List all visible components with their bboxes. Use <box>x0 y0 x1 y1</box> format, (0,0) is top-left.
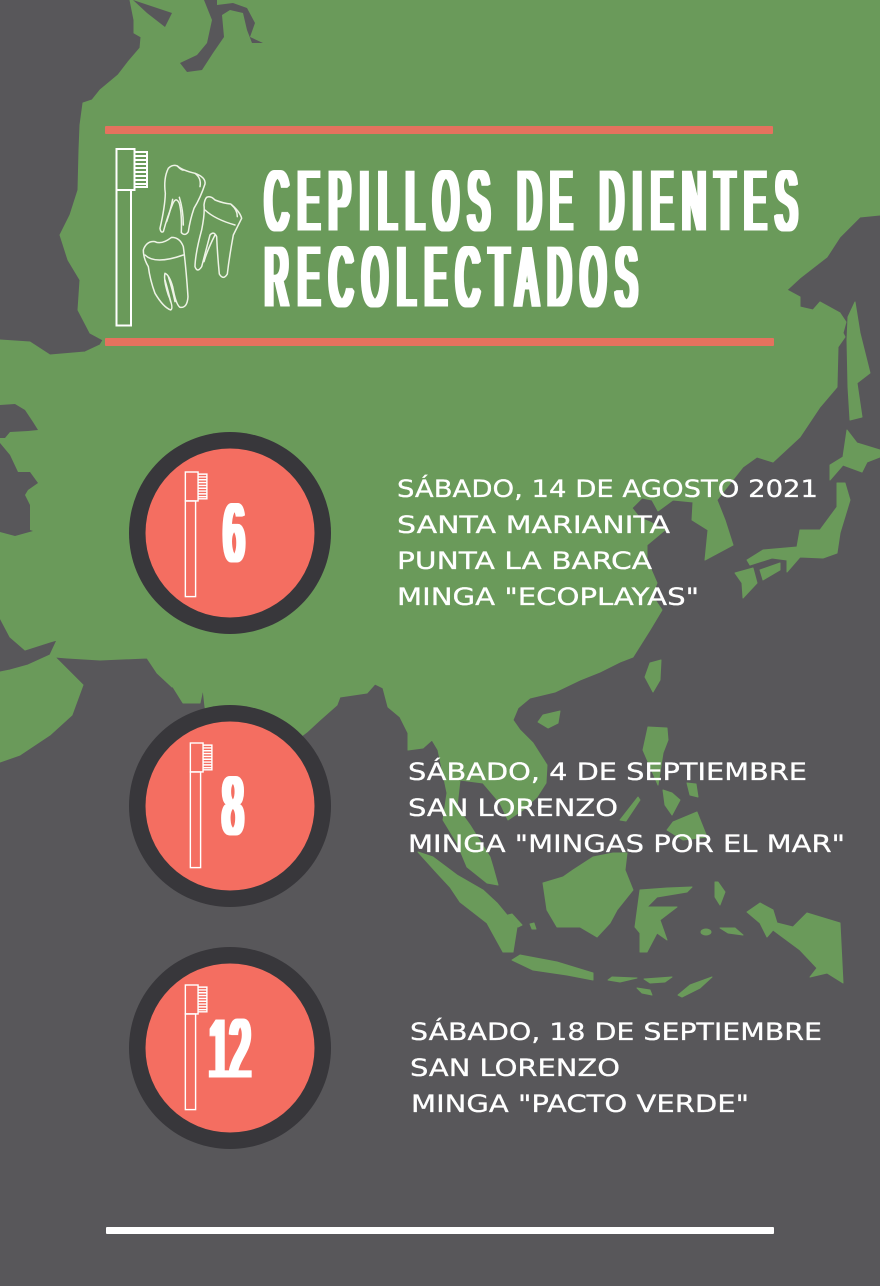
text block: event 1: SANTA MARIANITA <box>397 511 671 539</box>
text block: event 1: PUNTA LA BARCA <box>397 547 653 575</box>
text block: event 1 <box>397 474 818 611</box>
text block: event 3: SÁBADO, 18 DE SEPTIEMBRE <box>410 1017 822 1046</box>
badge: 6 brushes <box>129 432 331 634</box>
badge: 12 brushes <box>129 947 331 1149</box>
text block: event 3: SAN LORENZO <box>410 1054 620 1082</box>
text block: event 1: MINGA "ECOPLAYAS" <box>397 583 699 611</box>
map of Asia <box>0 0 880 997</box>
text block: event 3 <box>410 1017 822 1118</box>
bottom orange rule <box>105 338 774 346</box>
bottom white rule <box>106 1227 774 1234</box>
icon: large toothbrush <box>116 149 147 326</box>
badge: 12 brushes: 12 <box>209 1002 251 1095</box>
text block: event 2: MINGA "MINGAS POR EL MAR" <box>408 830 845 858</box>
text block: event 3: MINGA "PACTO VERDE" <box>411 1090 749 1118</box>
title: RECOLECTADOS <box>265 229 637 325</box>
text block: event 2: SAN LORENZO <box>408 794 618 822</box>
text block: event 2: SÁBADO, 4 DE SEPTIEMBRE <box>408 757 807 786</box>
inland waters <box>0 0 263 536</box>
badge: 8 brushes: 8 <box>222 759 243 852</box>
text block: event 1: SÁBADO, 14 DE AGOSTO 2021 <box>397 474 818 503</box>
top orange rule <box>105 126 773 134</box>
title: CEPILLOS DE DIENTES <box>265 153 797 249</box>
badge: 6 brushes: 6 <box>224 486 244 579</box>
title <box>265 153 797 325</box>
badge: 8 brushes <box>129 705 331 907</box>
text block: event 2 <box>408 757 845 858</box>
icon: three teeth <box>143 165 242 310</box>
